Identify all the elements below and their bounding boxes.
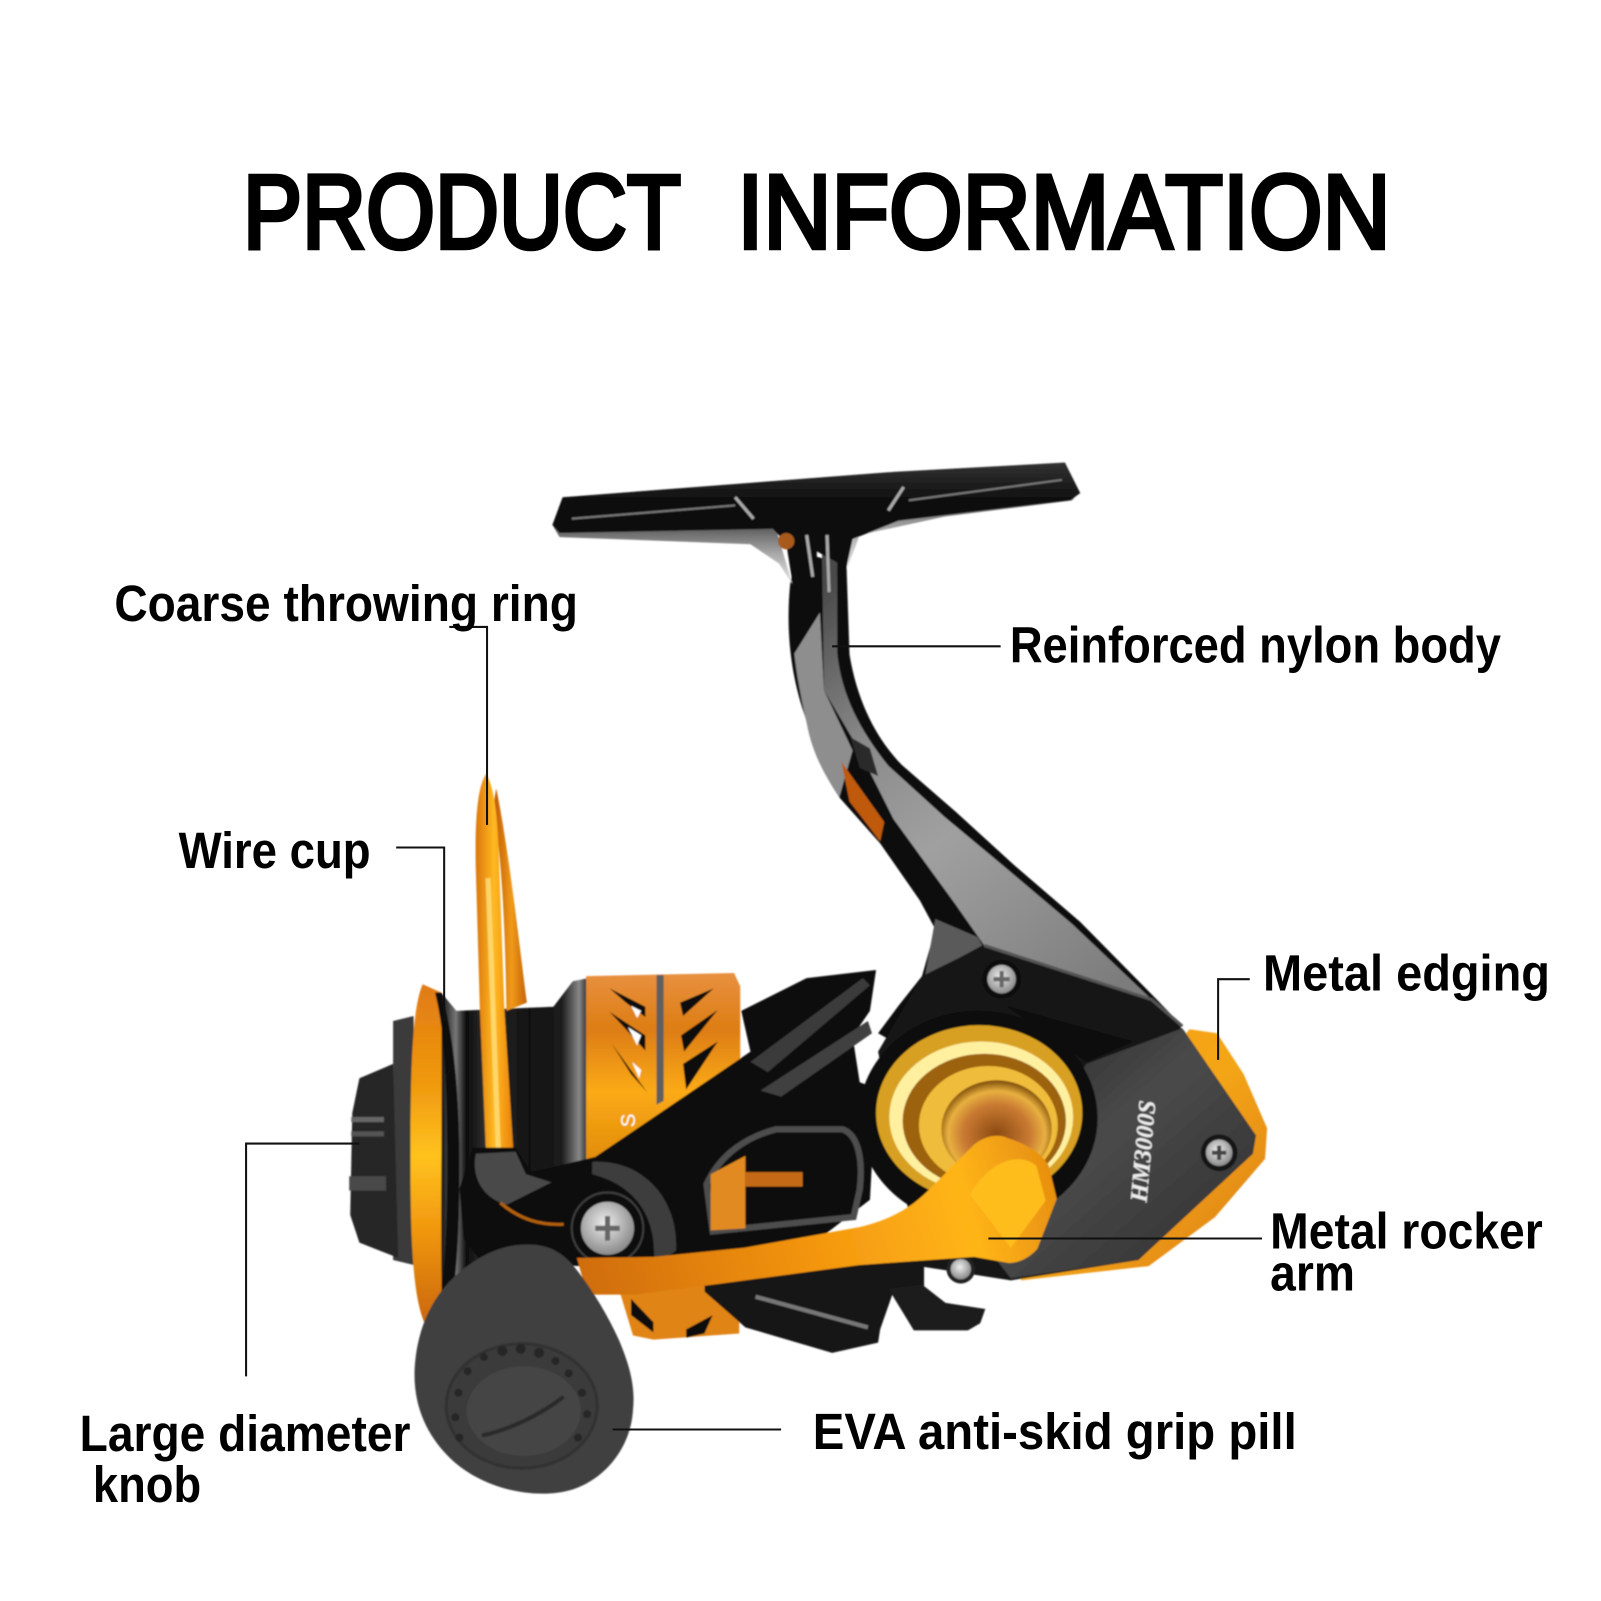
- spool lower section: [619, 1276, 739, 1340]
- reinforced body stem and T-foot: [552, 463, 1182, 1113]
- stem right gray panel: [822, 551, 1152, 1000]
- label: metal edging: Metal edging: [1263, 944, 1550, 1001]
- stem dark reflection: [851, 737, 878, 776]
- leader: coarse throwing ring: [449, 627, 487, 825]
- title: INFORMATION: [737, 154, 1391, 271]
- label: metal rocker arm: [1270, 1203, 1543, 1302]
- knob cap logo stroke: [482, 1397, 564, 1436]
- stem orange reflection: [841, 762, 884, 841]
- rotor arm: [459, 970, 876, 1268]
- stem left gray panel: [794, 613, 853, 797]
- arm gray streaks: [750, 978, 870, 1072]
- lower chevrons: [631, 1299, 713, 1338]
- arm window: [707, 1129, 861, 1231]
- title: PRODUCT: [243, 154, 681, 271]
- EVA grip knob: [414, 1245, 634, 1494]
- label: metal rocker arm: Metal rocker: [1270, 1203, 1543, 1260]
- label: large diameter knob: Large diameter: [80, 1405, 411, 1462]
- spool centre groove: [657, 975, 664, 1105]
- back strand of wire bail: [493, 788, 527, 1011]
- bracket highlight: [475, 1152, 551, 1205]
- gold rotor bearing rings: [859, 1011, 1098, 1225]
- neck gray highlight: [925, 919, 982, 976]
- side plate with metal edging: [878, 945, 1267, 1280]
- label: EVA grip: EVA anti-skid grip pill: [813, 1403, 1297, 1460]
- icon: rotor pivot screw: [572, 1193, 643, 1264]
- spool chevron slots: [610, 988, 718, 1093]
- leader: EVA grip: [613, 1428, 781, 1430]
- knob cap dots: [451, 1344, 591, 1442]
- label: large diameter knob: knob: [93, 1456, 201, 1513]
- icon: body screw bottom: [947, 1255, 975, 1283]
- rotor frame lower wedge: [705, 1251, 924, 1353]
- spool black body: [441, 978, 633, 1327]
- metal rocker arm: [577, 1136, 1057, 1295]
- spool chevron highlights: [628, 1006, 641, 1078]
- front spool flange: [410, 984, 459, 1329]
- label: wire cup: Wire cup: [179, 822, 371, 879]
- main wire bail: [476, 774, 514, 1154]
- leader: large diameter knob: [246, 1144, 359, 1376]
- label: large diameter knob: [80, 1405, 411, 1513]
- leader: wire cup: [396, 847, 444, 1021]
- orange spool skirt: [586, 973, 740, 1164]
- model mark: HM3000S: [1126, 1099, 1162, 1204]
- T-bar: [552, 463, 1080, 582]
- icon: body screw right: [1201, 1134, 1238, 1171]
- label: metal rocker arm: arm: [1270, 1245, 1355, 1302]
- pivot housing highlight: [592, 1162, 676, 1266]
- leader: metal rocker arm: [988, 1238, 1262, 1240]
- leader: metal edging: [1218, 979, 1250, 1060]
- label: coarse throwing ring: Coarse throwing ring: [114, 575, 578, 632]
- rotor frame foot: [888, 1284, 985, 1330]
- knob end cap: [446, 1344, 597, 1468]
- T-bar underside reflection: [552, 525, 792, 584]
- arm highlight: [970, 1159, 1046, 1248]
- label: reinforced nylon body: Reinforced nylon body: [1010, 617, 1501, 674]
- fishing reel product illustration: [349, 463, 1267, 1494]
- lower wedge highlight: [756, 1297, 868, 1327]
- title: [243, 154, 1391, 271]
- leader: reinforced nylon body: [832, 645, 1001, 647]
- T-bar lower streak: [572, 480, 1062, 519]
- T-bar ridges: [735, 487, 904, 592]
- icon: rear drag knob: [349, 1016, 419, 1266]
- icon: body screw top: [982, 960, 1021, 999]
- spool letter: S: [618, 1114, 640, 1127]
